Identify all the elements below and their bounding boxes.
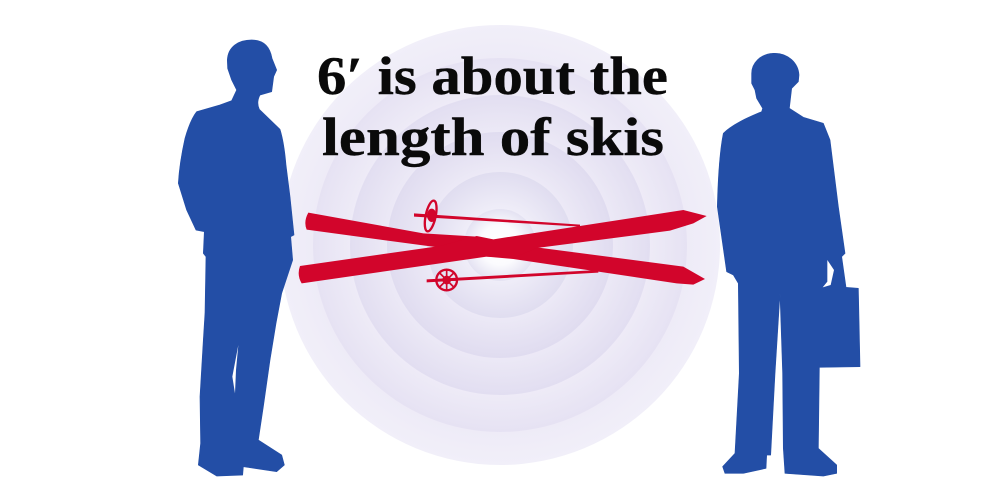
leg gap <box>232 345 238 393</box>
gap between arm and body <box>823 260 834 287</box>
ski: bottom-left to top-right <box>299 210 707 283</box>
silhouette: left man <box>178 40 294 476</box>
silhouette: right man with briefcase <box>717 53 860 476</box>
ski: top-left to bottom-right <box>305 213 705 285</box>
concentric circle background <box>280 25 720 465</box>
title: 6′ is about the <box>317 46 668 106</box>
pole: upper <box>414 200 580 232</box>
title <box>317 46 668 167</box>
red skis and poles <box>299 200 707 290</box>
pole: lower <box>427 270 598 290</box>
title: length of skis <box>322 107 664 167</box>
